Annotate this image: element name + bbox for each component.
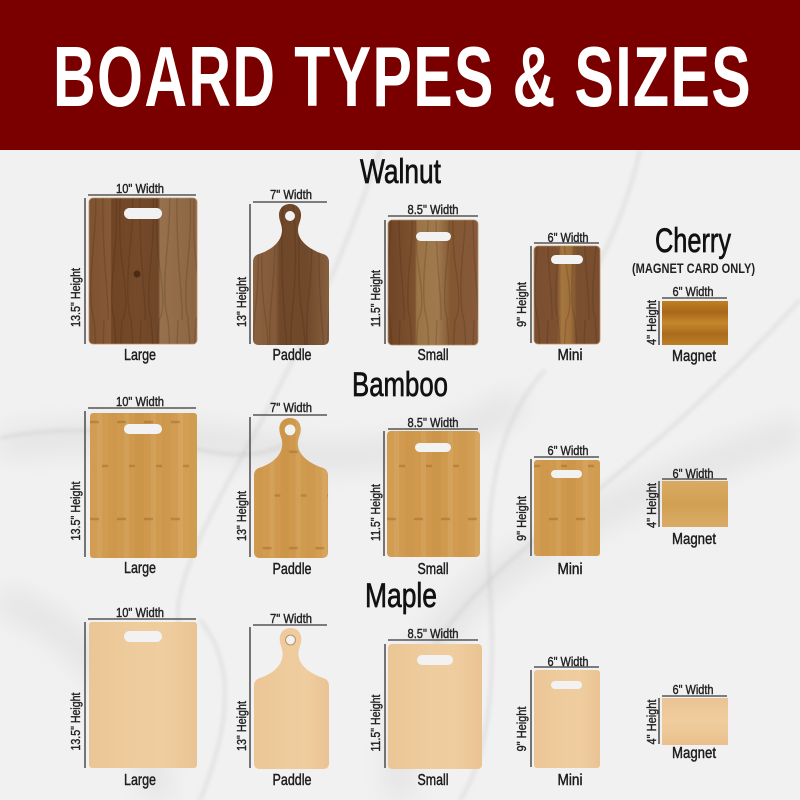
board: maple large: 13.5" Height (68, 692, 83, 750)
board: bamboo paddle: 13" Height (234, 491, 249, 541)
board: maple paddle: 13" Height (234, 701, 249, 751)
board: maple large: 10" Width (116, 605, 164, 620)
heading: Bamboo: Bamboo (352, 366, 448, 404)
board: walnut small (368, 202, 478, 364)
board: walnut paddle (234, 187, 329, 364)
panel: maple (68, 577, 728, 789)
board: walnut large: Large (124, 347, 156, 364)
board: bamboo paddle (234, 400, 328, 578)
board: bamboo small (368, 415, 480, 578)
panel: bamboo (68, 366, 728, 578)
board: maple small: 8.5" Width (408, 626, 458, 641)
board: bamboo small: Small (418, 561, 448, 578)
board: maple large: Large (124, 772, 156, 789)
board: cherry magnet: 6" Width (672, 284, 714, 299)
board: maple small: 11.5" Height (368, 694, 383, 752)
board: walnut paddle: 7" Width (270, 187, 312, 202)
board: maple mini (514, 654, 600, 789)
heading: Maple: Maple (365, 577, 437, 615)
board: maple mini: Mini (558, 772, 582, 789)
board: walnut mini: 9" Height (514, 282, 529, 327)
board: bamboo mini: Mini (558, 561, 582, 578)
title banner (0, 0, 800, 150)
board: bamboo large: Large (124, 560, 156, 577)
board: walnut small: 11.5" Height (368, 270, 383, 327)
board: walnut mini: Mini (558, 347, 582, 364)
board: bamboo magnet: Magnet (672, 531, 716, 548)
board: bamboo magnet (644, 466, 728, 548)
board: maple small (368, 626, 482, 789)
board: cherry magnet: Magnet (672, 348, 716, 365)
board: walnut small: 8.5" Width (408, 202, 458, 217)
board: maple paddle: Paddle (272, 772, 312, 789)
board: walnut mini: 6" Width (548, 230, 588, 245)
board: bamboo large: 13.5" Height (68, 481, 83, 540)
heading: Walnut: Walnut (360, 153, 441, 191)
board: maple small: Small (418, 772, 448, 789)
board: maple paddle (234, 611, 329, 789)
board: bamboo small: 11.5" Height (368, 484, 383, 541)
panel: walnut (68, 153, 600, 364)
subheading: magnet card only: (MAGNET CARD ONLY) (632, 260, 755, 276)
board: cherry magnet: 4" Height (644, 300, 659, 345)
board: maple large (68, 605, 197, 789)
board: maple magnet (644, 682, 728, 762)
board: walnut large (68, 181, 197, 364)
board: bamboo magnet: 6" Width (672, 466, 714, 481)
board: maple magnet: Magnet (672, 745, 716, 762)
board: walnut large: 10" Width (116, 181, 164, 196)
board: maple paddle: 7" Width (270, 611, 312, 626)
board: maple magnet: 6" Width (672, 682, 714, 697)
board: walnut large: 13.5" Height (68, 268, 83, 327)
board: bamboo large: 10" Width (116, 394, 164, 409)
board: bamboo magnet: 4" Height (644, 483, 659, 528)
board: maple mini: 9" Height (514, 706, 529, 752)
board: bamboo mini (514, 443, 600, 578)
board: maple mini: 6" Width (548, 654, 588, 669)
board: bamboo mini: 6" Width (548, 443, 588, 458)
board: walnut paddle: Paddle (272, 347, 312, 364)
board: maple magnet: 4" Height (644, 699, 659, 744)
board: bamboo small: 8.5" Width (408, 415, 458, 430)
board: walnut small: Small (418, 347, 448, 364)
board: walnut mini (514, 230, 600, 364)
heading: Cherry: Cherry (655, 222, 731, 260)
board: bamboo large (68, 394, 197, 577)
board: bamboo paddle: 7" Width (270, 400, 312, 415)
board: walnut paddle: 13" Height (234, 277, 249, 327)
board: bamboo mini: 9" Height (514, 496, 529, 541)
board: cherry magnet (644, 284, 728, 365)
panel: cherry (632, 222, 755, 365)
board: bamboo paddle: Paddle (272, 561, 312, 578)
